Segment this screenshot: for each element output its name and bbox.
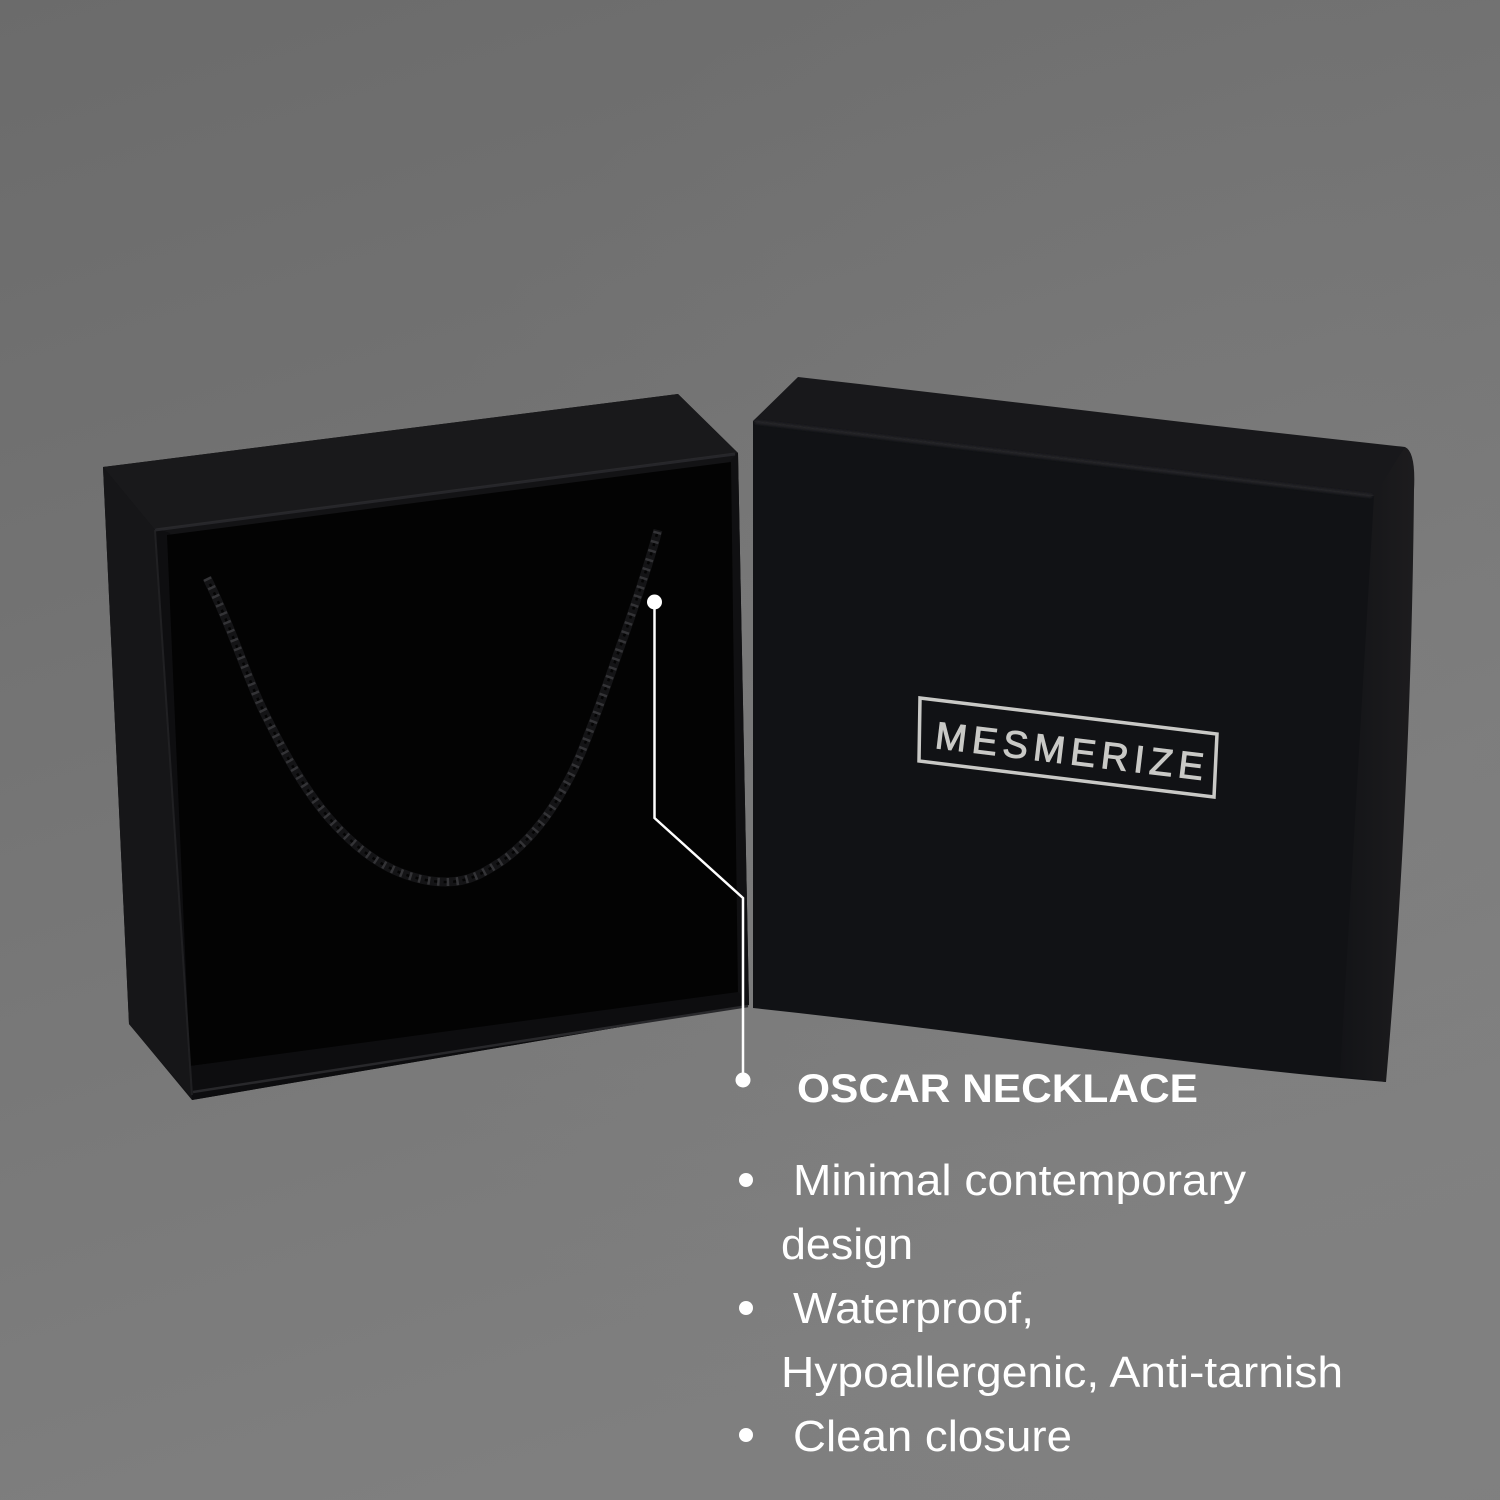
bullet: minimal design: Minimal contemporary xyxy=(793,1156,1246,1205)
bullet: waterproof: Hypoallergenic, Anti-tarnish xyxy=(781,1348,1343,1397)
closed lid xyxy=(753,377,1414,1082)
lid top face xyxy=(753,377,1414,496)
bullet: clean closure: Clean closure xyxy=(793,1412,1072,1461)
box outer silhouette xyxy=(103,394,749,1100)
front lip xyxy=(190,992,749,1100)
velvet pad xyxy=(167,462,738,1066)
open box base xyxy=(103,394,749,1100)
rope necklace xyxy=(207,530,658,882)
callout leader line xyxy=(647,594,750,1088)
logo frame xyxy=(919,698,1217,797)
feature list xyxy=(739,1156,1343,1461)
box back rim xyxy=(103,394,738,530)
bullet: waterproof: Waterproof, xyxy=(793,1284,1034,1333)
lid front face xyxy=(753,421,1386,1082)
bullet: minimal design: design xyxy=(781,1220,913,1269)
lid right side xyxy=(1340,447,1414,1082)
product title: OSCAR NECKLACE xyxy=(797,1067,1198,1111)
bullet: waterproof xyxy=(739,1284,1343,1397)
box left rim xyxy=(103,467,192,1098)
inner right wall xyxy=(729,453,749,1005)
bullet: minimal design xyxy=(739,1156,1246,1269)
logo wordmark: MESMERIZE xyxy=(933,715,1206,789)
inner left wall xyxy=(155,528,198,1095)
